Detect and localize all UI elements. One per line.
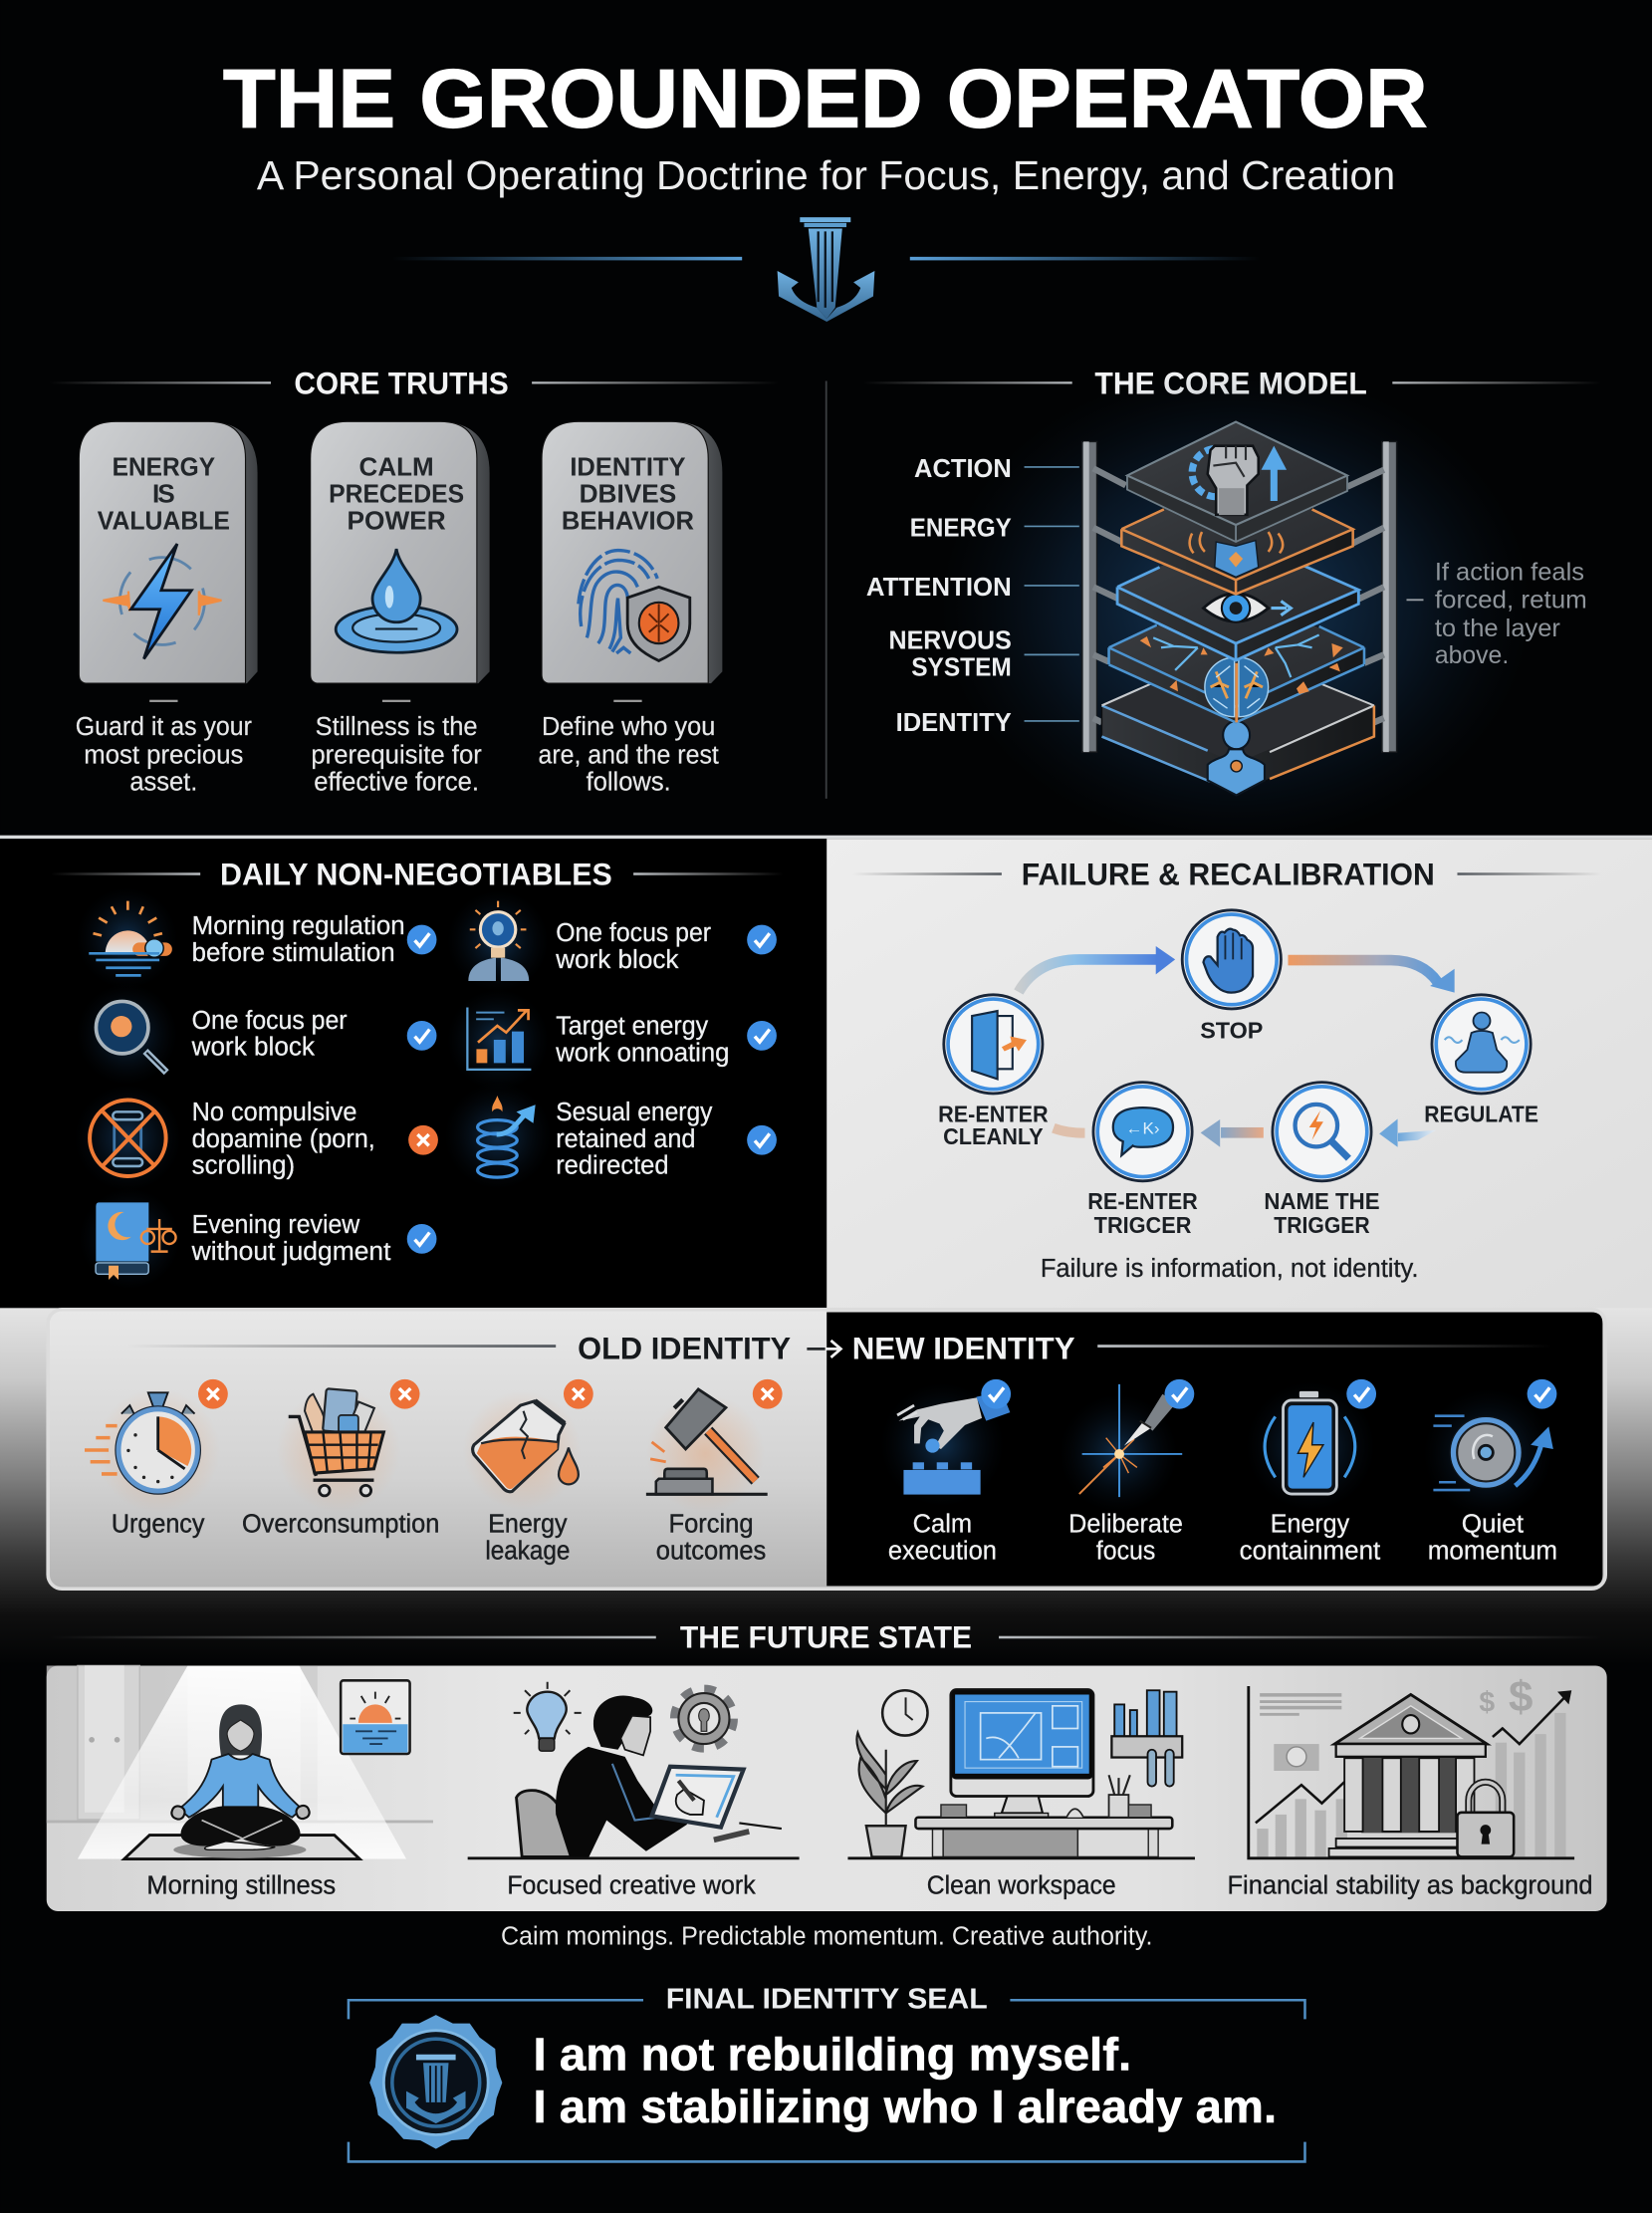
bulb <box>514 1682 582 1751</box>
item: morning regulation <box>77 887 436 989</box>
item: evening review: Evening review <box>192 1209 359 1239</box>
item: one focus left: One focus per <box>192 1005 348 1035</box>
step: name the trigger <box>1264 1083 1380 1238</box>
scene: clean workspace: Clean workspace <box>927 1871 1116 1899</box>
item: no compulsive dopamine <box>75 1085 438 1192</box>
tablet: calm precedes power <box>311 421 490 683</box>
new: energy containment <box>1240 1379 1381 1565</box>
icon: eye <box>1203 594 1291 622</box>
side note <box>1406 559 1587 669</box>
icon: hand <box>1203 929 1253 993</box>
old: urgency <box>85 1379 228 1539</box>
heading: core truths: CORE TRUTHS <box>294 366 509 400</box>
item: sexual energy: retained and <box>556 1123 695 1153</box>
step: name the trigger: TRIGGER <box>1274 1212 1370 1238</box>
scene: focused creative work <box>468 1682 800 1899</box>
layer: identity <box>1101 652 1374 795</box>
step: regulate <box>1424 995 1538 1126</box>
item: one focus right: One focus per <box>556 917 711 947</box>
old: energy leakage <box>463 1379 593 1565</box>
new: deliberate focus: Deliberate <box>1068 1509 1183 1539</box>
header divider right <box>910 257 1260 260</box>
tablet: calm precedes power: POWER <box>348 505 446 535</box>
old: overconsumption: Overconsumption <box>242 1509 439 1539</box>
seal statement: I am not rebuilding myself. <box>534 2028 1131 2080</box>
icon: magnifier with spark <box>1296 1105 1348 1158</box>
arrow: re-enter to stop <box>1019 946 1175 992</box>
icon: door <box>972 1011 1027 1079</box>
scene: morning stillness: Morning stillness <box>146 1871 336 1899</box>
header divider left <box>392 257 742 260</box>
old: forcing outcomes: Forcing <box>669 1509 754 1539</box>
old: energy leakage: leakage <box>485 1535 570 1565</box>
scene: financial stability <box>1228 1672 1592 1899</box>
white section line <box>0 836 1652 839</box>
section background gradient <box>0 1308 1652 1665</box>
panel: final identity seal <box>349 1984 1304 2161</box>
seal frame <box>349 2000 1304 2161</box>
new: calm execution: Calm <box>913 1509 972 1539</box>
icon: pillar anchor <box>778 217 874 322</box>
header <box>223 52 1428 322</box>
scene: morning stillness <box>47 1665 433 1899</box>
layer labels: ACTION <box>914 455 1012 483</box>
wall picture: sunrise <box>341 1680 410 1754</box>
heading: failure: FAILURE & RECALIBRATION <box>1022 857 1435 891</box>
item: no compulsive dopamine: dopamine (porn, <box>192 1123 375 1153</box>
layer labels: SYSTEM <box>911 654 1012 682</box>
step: re-enter trigger: TRIGCER <box>1094 1212 1192 1238</box>
layer labels <box>866 455 1079 737</box>
item: target energy: work onnoating <box>555 1037 729 1067</box>
layer: nervous system <box>1109 592 1364 722</box>
panel: old to new identity <box>48 1310 1605 1589</box>
new: quiet momentum <box>1423 1379 1557 1565</box>
item: evening review: without judgment <box>191 1236 391 1266</box>
tablet: identity drives behavior: DBIVES <box>580 478 676 508</box>
desk <box>915 1775 1172 1856</box>
yoga mat <box>124 1836 359 1859</box>
old: forcing outcomes <box>646 1379 783 1565</box>
new: energy containment: containment <box>1240 1535 1381 1565</box>
scene: financial stability: Financial stability as background <box>1228 1871 1592 1899</box>
new: deliberate focus: focus <box>1096 1535 1155 1565</box>
wall organizer <box>1111 1690 1182 1787</box>
bank building <box>1329 1694 1487 1856</box>
new: quiet momentum: momentum <box>1428 1535 1557 1565</box>
item: sexual energy <box>444 1083 777 1189</box>
icon: water drop <box>336 549 457 652</box>
icon: speech bubble <box>1113 1107 1173 1155</box>
tablet caption: energy: asset. <box>129 768 197 796</box>
faded chart bars <box>1257 1713 1566 1856</box>
tablet caption: energy: Guard it as your <box>76 713 252 741</box>
monitor <box>951 1690 1093 1818</box>
panel: failure and recalibration <box>826 839 1652 1309</box>
item: one focus right: work block <box>555 944 679 974</box>
icon: fist and gear <box>1192 446 1287 515</box>
tablet caption: calm: effective force. <box>314 768 479 796</box>
step: name the trigger: NAME THE <box>1264 1188 1380 1214</box>
step: re-enter trigger <box>1087 1083 1198 1238</box>
item: one focus left <box>77 983 436 1085</box>
clock <box>882 1690 928 1736</box>
tablet: identity drives behavior: BEHAVIOR <box>562 505 694 535</box>
icon: energy core <box>1190 532 1283 577</box>
step: re-enter cleanly: CLEANLY <box>943 1123 1044 1149</box>
tablet caption: identity: are, and the rest <box>538 741 719 769</box>
vertical divider <box>826 381 827 799</box>
layer: energy <box>1121 473 1353 594</box>
heading: new identity: NEW IDENTITY <box>852 1331 1075 1365</box>
panel: future state <box>47 1665 1607 1911</box>
tablet: energy is valuable <box>79 421 258 683</box>
layer: attention <box>1117 531 1358 660</box>
step: re-enter cleanly <box>938 995 1049 1149</box>
arrow: trigger to re-enter <box>1054 1128 1084 1133</box>
meditating woman <box>170 1704 311 1849</box>
side note: above. <box>1435 642 1509 669</box>
item: evening review <box>79 1188 436 1290</box>
old: overconsumption <box>242 1379 439 1539</box>
stack glow <box>940 367 1533 847</box>
tablet: calm precedes power: PRECEDES <box>329 478 464 508</box>
icon: speech bubble: ←K› <box>1126 1118 1160 1137</box>
layer labels: IDENTITY <box>896 709 1012 737</box>
icon: meditating figure <box>1445 1013 1520 1073</box>
panel: final identity seal: I am stabilizing who I already am. <box>534 2081 1277 2132</box>
plant <box>856 1733 923 1856</box>
tablet caption: energy <box>76 700 252 796</box>
layer labels: ENERGY <box>910 514 1012 542</box>
new: calm execution <box>880 1379 1011 1565</box>
drawing tablet <box>652 1767 782 1840</box>
gear <box>674 1689 734 1748</box>
side note: If action feals <box>1435 559 1584 586</box>
side note: forced, retum <box>1435 588 1587 615</box>
heading: future state: THE FUTURE STATE <box>680 1620 972 1655</box>
item: target energy <box>447 989 777 1091</box>
step: stop: STOP <box>1200 1018 1263 1044</box>
heading: old identity: OLD IDENTITY <box>578 1331 791 1365</box>
tablet: calm precedes power: CALM <box>359 451 434 481</box>
old: urgency: Urgency <box>112 1509 205 1539</box>
panel: core model <box>863 366 1601 847</box>
note: failure is information: Failure is information, not identity. <box>1041 1255 1419 1283</box>
heading: daily: DAILY NON-NEGOTIABLES <box>220 857 612 891</box>
tablet caption: calm: prerequisite for <box>311 741 482 769</box>
icon: neural branches and brain <box>1140 635 1343 722</box>
layer labels: ATTENTION <box>866 574 1012 602</box>
heading: seal: FINAL IDENTITY SEAL <box>666 1984 988 2016</box>
panel: core truths <box>50 366 779 796</box>
item: one focus right <box>447 890 777 992</box>
new: deliberate focus <box>1060 1379 1194 1565</box>
step: stop <box>1182 910 1281 1044</box>
light beam <box>78 1665 406 1859</box>
scene: clean workspace <box>847 1690 1195 1899</box>
tagline: Caim momings. Predictable momentum. Creative authority. <box>501 1922 1152 1950</box>
arrow: regulate to name <box>1379 1118 1436 1147</box>
step: re-enter trigger: RE-ENTER <box>1087 1188 1198 1214</box>
trend line <box>1256 1694 1567 1823</box>
item: no compulsive dopamine: No compulsive <box>192 1097 356 1126</box>
tablet caption: identity: follows. <box>587 768 671 796</box>
tablet caption: identity: Define who you <box>542 713 715 741</box>
tablet caption: calm <box>311 700 482 796</box>
faded notes and banknote <box>1260 1693 1341 1771</box>
arrow: name to re-enter trigger <box>1201 1119 1264 1147</box>
old: forcing outcomes: outcomes <box>656 1535 766 1565</box>
tablet caption: calm: Stillness is the <box>316 713 478 741</box>
item: no compulsive dopamine: scrolling) <box>192 1150 295 1180</box>
item: sexual energy: Sesual energy <box>556 1097 713 1126</box>
dollar signs: $ <box>1479 1686 1495 1718</box>
icon: seal badge <box>369 2015 502 2149</box>
new: energy containment: Energy <box>1271 1509 1350 1539</box>
arrow: stop to regulate <box>1288 960 1455 993</box>
item: sexual energy: redirected <box>556 1150 669 1180</box>
old: energy leakage: Energy <box>488 1509 568 1539</box>
layer labels: NERVOUS <box>889 627 1012 655</box>
item: morning regulation: Morning regulation <box>192 910 405 940</box>
subtitle: A Personal Operating Doctrine for Focus, Energy, and Creation <box>257 152 1395 198</box>
side note: to the layer <box>1435 615 1560 642</box>
title: THE GROUNDED OPERATOR <box>223 52 1428 145</box>
new: calm execution: execution <box>888 1535 997 1565</box>
new identity dark half <box>826 1313 1602 1586</box>
padlock <box>1457 1782 1514 1856</box>
tablet: identity drives behavior: IDENTITY <box>570 451 686 481</box>
stack poles <box>1082 441 1397 752</box>
new: quiet momentum: Quiet <box>1462 1509 1525 1539</box>
tablet: energy is valuable: VALUABLE <box>98 505 230 535</box>
item: morning regulation: before stimulation <box>192 937 395 967</box>
layer: action <box>1127 422 1347 542</box>
item: one focus left: work block <box>191 1032 316 1062</box>
icon: identity figure <box>1208 721 1265 795</box>
tablet caption: energy: most precious <box>84 741 243 769</box>
tablet: energy is valuable: ENERGY <box>113 451 216 481</box>
chair <box>517 1791 585 1856</box>
man <box>556 1696 687 1858</box>
scene: focused creative work: Focused creative work <box>507 1871 756 1899</box>
tablet: identity drives behavior <box>542 421 722 683</box>
icon: fingerprint and shield <box>579 551 690 660</box>
scene: financial stability: $ <box>1509 1672 1533 1721</box>
panel: daily non-negotiables <box>0 839 826 1308</box>
arrow: old to new <box>807 1341 840 1357</box>
tablet: energy is valuable: IS <box>152 478 175 508</box>
heading: core model: THE CORE MODEL <box>1094 366 1367 400</box>
step: regulate: REGULATE <box>1424 1101 1538 1126</box>
step: re-enter cleanly: RE-ENTER <box>938 1101 1049 1126</box>
icon: lightning bolt <box>103 544 221 659</box>
tablet caption: identity <box>538 700 719 796</box>
item: target energy: Target energy <box>556 1010 709 1040</box>
